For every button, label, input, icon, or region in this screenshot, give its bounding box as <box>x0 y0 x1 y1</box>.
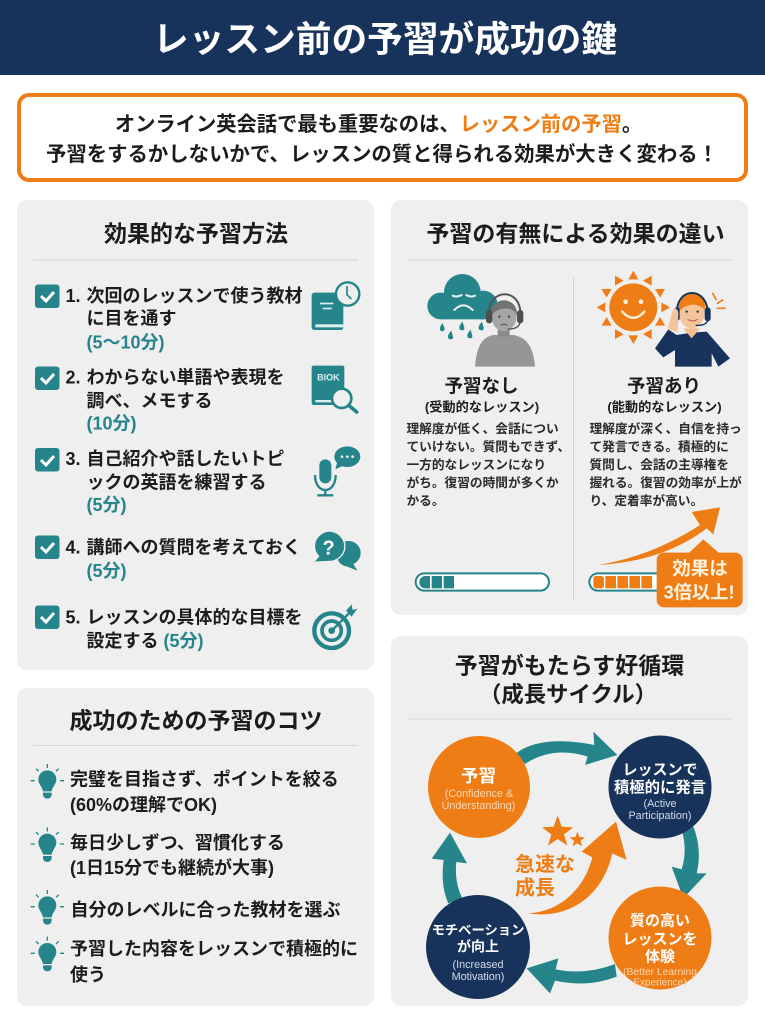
item 1: (5〜10分) <box>86 332 165 352</box>
text: with preparation: (能動的なレッスン) <box>607 398 722 414</box>
icon: rain cloud with sad learner <box>427 274 535 367</box>
node: active participation: レッスンで <box>622 762 698 778</box>
text: with preparation: 予習あり <box>627 376 701 396</box>
panel: preparation tips <box>17 688 374 1006</box>
node: increased motivation: (Increased <box>452 959 504 971</box>
text: rapid growth: 急速な <box>515 853 575 876</box>
icon: sun with happy learner <box>597 271 730 367</box>
icon: light bulb 1 <box>31 764 64 799</box>
arrow: bottom cycle <box>527 958 617 993</box>
item 2: (10分) <box>86 414 137 434</box>
icon: question bubbles <box>313 531 361 571</box>
tip 4: 予習した内容をレッスンで積極的に <box>70 939 358 959</box>
text: with preparation: 質問し、会話の主導権を <box>590 457 729 472</box>
text: without preparation: (受動的なレッスン) <box>425 398 539 414</box>
item 5: 設定する (5分) <box>86 631 204 651</box>
node: preparation: Understanding) <box>442 800 515 812</box>
node: increased motivation: Motivation) <box>452 971 504 983</box>
heading: comparison: 予習の有無による効果の違い <box>426 220 725 246</box>
text: with preparation: 握れる。復習の効率が上が <box>590 475 742 490</box>
progress bar: low effect <box>416 573 549 591</box>
node: better learning experience: 体験 <box>645 948 675 966</box>
title banner <box>0 0 765 75</box>
item 3: 3. <box>66 449 81 469</box>
node: better learning experience: (Better Learning <box>623 967 697 978</box>
item 3: ックの英語を練習する <box>86 472 266 492</box>
item 5 <box>35 606 302 651</box>
icon: book and magnifier <box>312 366 357 412</box>
text: with preparation: 理解度が深く、自信を持っ <box>590 421 742 436</box>
node: preparation: 予習 <box>461 766 496 786</box>
text: rapid growth <box>515 853 575 900</box>
arrow: top cycle <box>516 732 617 765</box>
item 1 <box>35 284 302 352</box>
text: without preparation: 一方的なレッスンになり <box>406 457 546 472</box>
item 2: 調べ、メモする <box>86 391 212 411</box>
node: better learning experience: 質の高い <box>630 912 690 930</box>
item 1: 1. <box>66 286 81 306</box>
node: active participation: Participation) <box>628 810 692 822</box>
icon: light bulb 3 <box>31 890 64 925</box>
node: better learning experience <box>608 886 712 990</box>
node: better learning experience: レッスンを <box>622 931 698 948</box>
icon: microphone and speech bubble <box>315 446 360 495</box>
item 2 <box>35 366 284 434</box>
tip 1: 完璧を目指さず、ポイントを絞る <box>70 768 339 790</box>
item 2: わからない単語や表現を <box>86 366 284 388</box>
item 1: に目を通す <box>86 308 176 328</box>
badge: 3x effect: 3倍以上! <box>663 582 735 602</box>
tip 1 <box>70 768 339 815</box>
node: preparation: (Confidence & <box>445 788 514 800</box>
icon: light bulb 4 <box>31 937 64 971</box>
badge: 3x effect: 効果は <box>672 558 728 579</box>
panel: effective preparation methods <box>17 200 374 670</box>
arrow: left cycle <box>432 833 467 903</box>
arrow: rising effect <box>598 507 720 565</box>
icon: question bubbles: ? <box>323 538 335 560</box>
panel: growth cycle: （成長サイクル） <box>479 682 657 707</box>
item 5: 5. <box>66 608 81 628</box>
panel: effect comparison <box>391 200 748 615</box>
item 3: (5分) <box>86 495 127 515</box>
callout <box>19 95 746 180</box>
heading: tips: 成功のための予習のコツ <box>70 708 322 734</box>
heading: growth cycle: 予習がもたらす好循環 <box>455 652 684 678</box>
tip 3: 自分のレベルに合った教材を選ぶ <box>70 900 340 920</box>
tip 2 <box>70 833 285 878</box>
item 3: 自己紹介や話したいトピ <box>86 449 284 469</box>
item 4 <box>35 536 301 581</box>
item 4: (5分) <box>86 561 127 581</box>
icon: stars <box>542 815 585 846</box>
arrow: right cycle <box>672 827 707 898</box>
text: rapid growth: 成長 <box>515 876 555 900</box>
tip 4: 使う <box>70 965 106 985</box>
text: with preparation <box>590 376 742 508</box>
callout: 予習をするかしないかで、レッスンの質と得られる効果が大きく変わる！ <box>46 142 718 166</box>
item 1: 次回のレッスンで使う教材 <box>86 286 302 306</box>
node: active participation: (Active <box>644 798 676 810</box>
item 4: 4. <box>66 538 81 558</box>
text: without preparation: 予習なし <box>444 376 519 396</box>
icon: book and clock <box>312 282 359 330</box>
heading: methods: 効果的な予習方法 <box>104 220 288 246</box>
tip 4 <box>70 939 358 985</box>
icon: target <box>314 605 357 648</box>
badge: 3x effect <box>657 539 743 607</box>
text: without preparation: がち。復習の時間が多くか <box>406 475 559 490</box>
tip 2: (1日15分でも継続が大事) <box>70 857 274 878</box>
text: without preparation: かる。 <box>406 494 445 508</box>
item 2: 2. <box>66 368 81 388</box>
text: with preparation: て発言できる。積極的に <box>590 439 729 454</box>
node: increased motivation <box>426 895 530 999</box>
node: active participation: 積極的に発言 <box>614 778 706 796</box>
text: with preparation: り、定着率が高い。 <box>590 493 703 508</box>
arrow: rapid growth <box>528 822 627 914</box>
node: increased motivation: モチベーション <box>432 922 524 938</box>
text: without preparation: 理解度が低く、会話につい <box>406 421 559 436</box>
tip 1: (60%の理解でOK) <box>70 795 217 815</box>
item 3 <box>35 448 284 515</box>
tip 2: 毎日少しずつ、習慣化する <box>70 833 285 853</box>
icon: book and magnifier: BIOK <box>317 372 340 382</box>
item 4: 講師への質問を考えておく <box>86 538 301 558</box>
text: without preparation: ていけない。質問もできず、 <box>406 439 570 454</box>
panel: growth cycle <box>391 636 748 1006</box>
text: without preparation <box>406 376 570 508</box>
callout: オンライン英会話で最も重要なのは、レッスン前の予習。 <box>115 113 642 136</box>
progress bar: high effect <box>589 573 689 591</box>
node: preparation <box>428 736 530 838</box>
node: increased motivation: が向上 <box>457 938 499 954</box>
title banner: レッスン前の予習が成功の鍵 <box>153 20 617 60</box>
item 5: レッスンの具体的な目標を <box>86 608 302 628</box>
node: better learning experience: Experience) <box>633 978 687 988</box>
node: active participation <box>608 736 712 838</box>
icon: light bulb 2 <box>31 827 64 862</box>
